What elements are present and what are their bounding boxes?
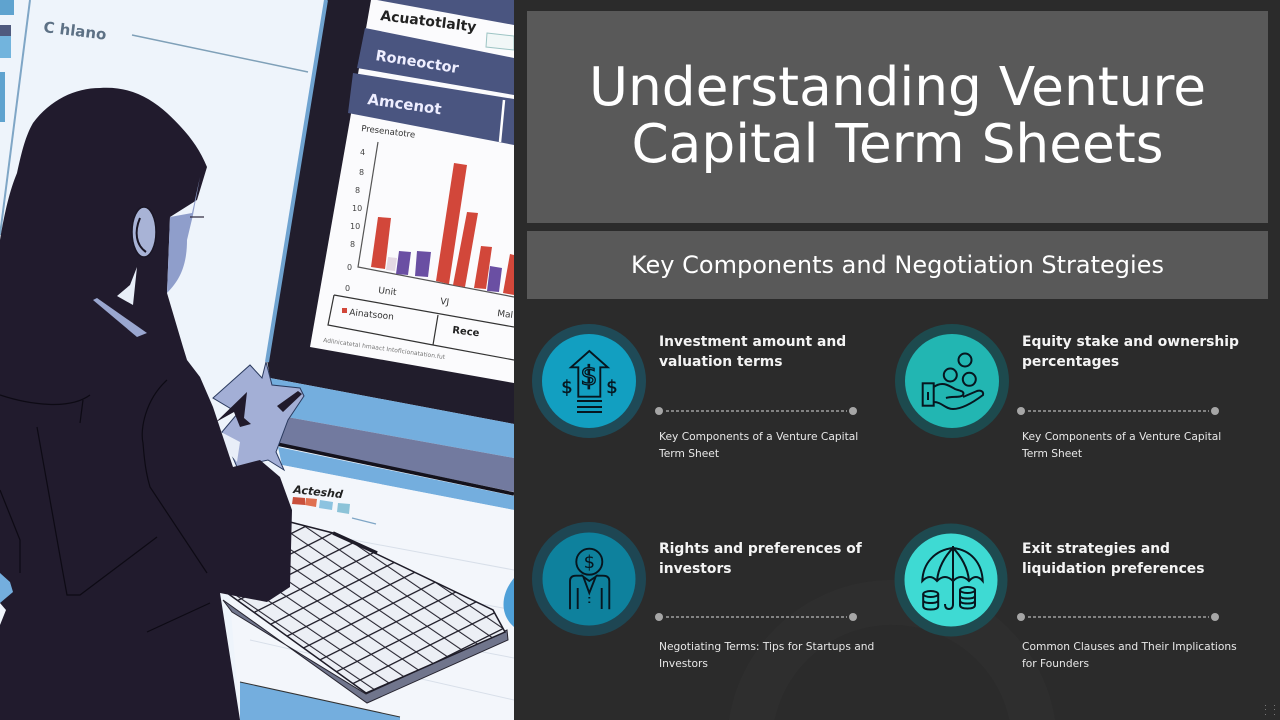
chart legend table [323,295,514,361]
spreadsheet screen: Roneoctor [374,48,461,77]
background arcs [700,560,1100,720]
icon: dollar arrow: $ [606,377,618,398]
subtitle: Key Components and Negotiation Strategies [631,251,1164,279]
description [1022,640,1237,670]
heading: investors [659,561,732,577]
icon: investor with dollar head: $ [584,552,595,573]
heading [1022,541,1204,577]
heading [659,334,846,370]
corner grip dots [1265,705,1275,715]
description: Term Sheet [659,447,719,460]
title: Understanding Venture [589,55,1206,118]
divider [655,407,857,415]
collar [93,298,147,337]
bar chart on screen: Mal [497,309,514,321]
left screen heading [43,18,308,72]
heading [659,541,862,577]
desk and keyboard surface: Acteshd [292,483,344,501]
description: Term Sheet [1022,447,1082,460]
item: equity stake [895,324,1239,460]
title panel [527,11,1268,223]
title [589,55,1206,175]
icon: dollar arrow: $ [561,377,573,398]
icon: dollar arrow [532,324,646,438]
chart legend table: Ainatsoon [349,308,394,323]
bar chart on screen: 10 [350,222,360,231]
monitor bezel [267,0,514,424]
description: Key Components of a Venture Capital [1022,430,1221,443]
description [658,430,858,460]
bar chart on screen: 4 [360,148,365,157]
bar chart on screen [345,142,514,321]
description [1022,430,1221,460]
chart legend table: Adlinicatetal hmaact Intoflcionatation.fut [323,337,446,361]
heading [1022,334,1239,370]
bar chart on screen: 8 [355,186,360,195]
item: investment amount [532,324,858,460]
bar chart on screen: Unit [378,286,398,298]
description: Investors [659,657,708,670]
bar chart on screen: 0 [345,284,350,293]
description: Key Components of a Venture Capital [659,430,858,443]
spreadsheet screen: Presenatotre [361,124,416,141]
hand [213,362,304,470]
subtitle panel [527,231,1268,299]
icon: hand with coins [895,324,1009,438]
keyboard [223,522,508,703]
finger gaps [216,391,302,427]
wrist block [221,432,240,462]
icon: umbrella over coins [894,524,1008,636]
description [659,640,874,670]
description: for Founders [1022,657,1089,670]
spreadsheet screen: Amcenot [366,90,443,118]
title: Capital Term Sheets [631,112,1164,175]
monitor lower bands [262,378,514,510]
bar chart on screen: 10 [352,204,362,213]
spreadsheet screen [310,0,514,383]
left screen heading: C hlano [43,18,107,44]
spreadsheet screen: Acuatotlalty [380,8,477,36]
item: rights and preferences [532,522,874,670]
heading: liquidation preferences [1022,561,1204,577]
divider [655,613,857,621]
heading: Equity stake and ownership [1022,334,1239,350]
heading: Rights and preferences of [659,541,862,557]
heading: percentages [1022,354,1119,370]
illustration: woman reviewing term sheet on monitor [0,0,514,720]
icon: investor with dollar head [532,522,646,636]
description: Common Clauses and Their Implications [1022,640,1237,653]
heading: valuation terms [659,354,782,370]
woman figure [0,88,304,720]
divider [1017,407,1219,415]
icon: dollar arrow: $ [580,361,598,392]
heading: Exit strategies and [1022,541,1170,557]
jacket seams [0,380,210,632]
ear [132,207,156,257]
divider [1017,613,1219,621]
bar chart on screen: VJ [440,297,450,308]
description: Negotiating Terms: Tips for Startups and [659,640,874,653]
chart legend table: Rece [452,325,480,339]
desk and keyboard surface [230,465,514,720]
heading: Investment amount and [659,334,846,350]
item: exit strategies [894,524,1237,670]
bar chart on screen: 8 [359,168,364,177]
face [167,177,200,293]
left screen tiles [0,0,30,235]
bar chart on screen: 8 [350,240,355,249]
jacket and hair [0,88,292,720]
bar chart on screen: 0 [347,263,352,272]
